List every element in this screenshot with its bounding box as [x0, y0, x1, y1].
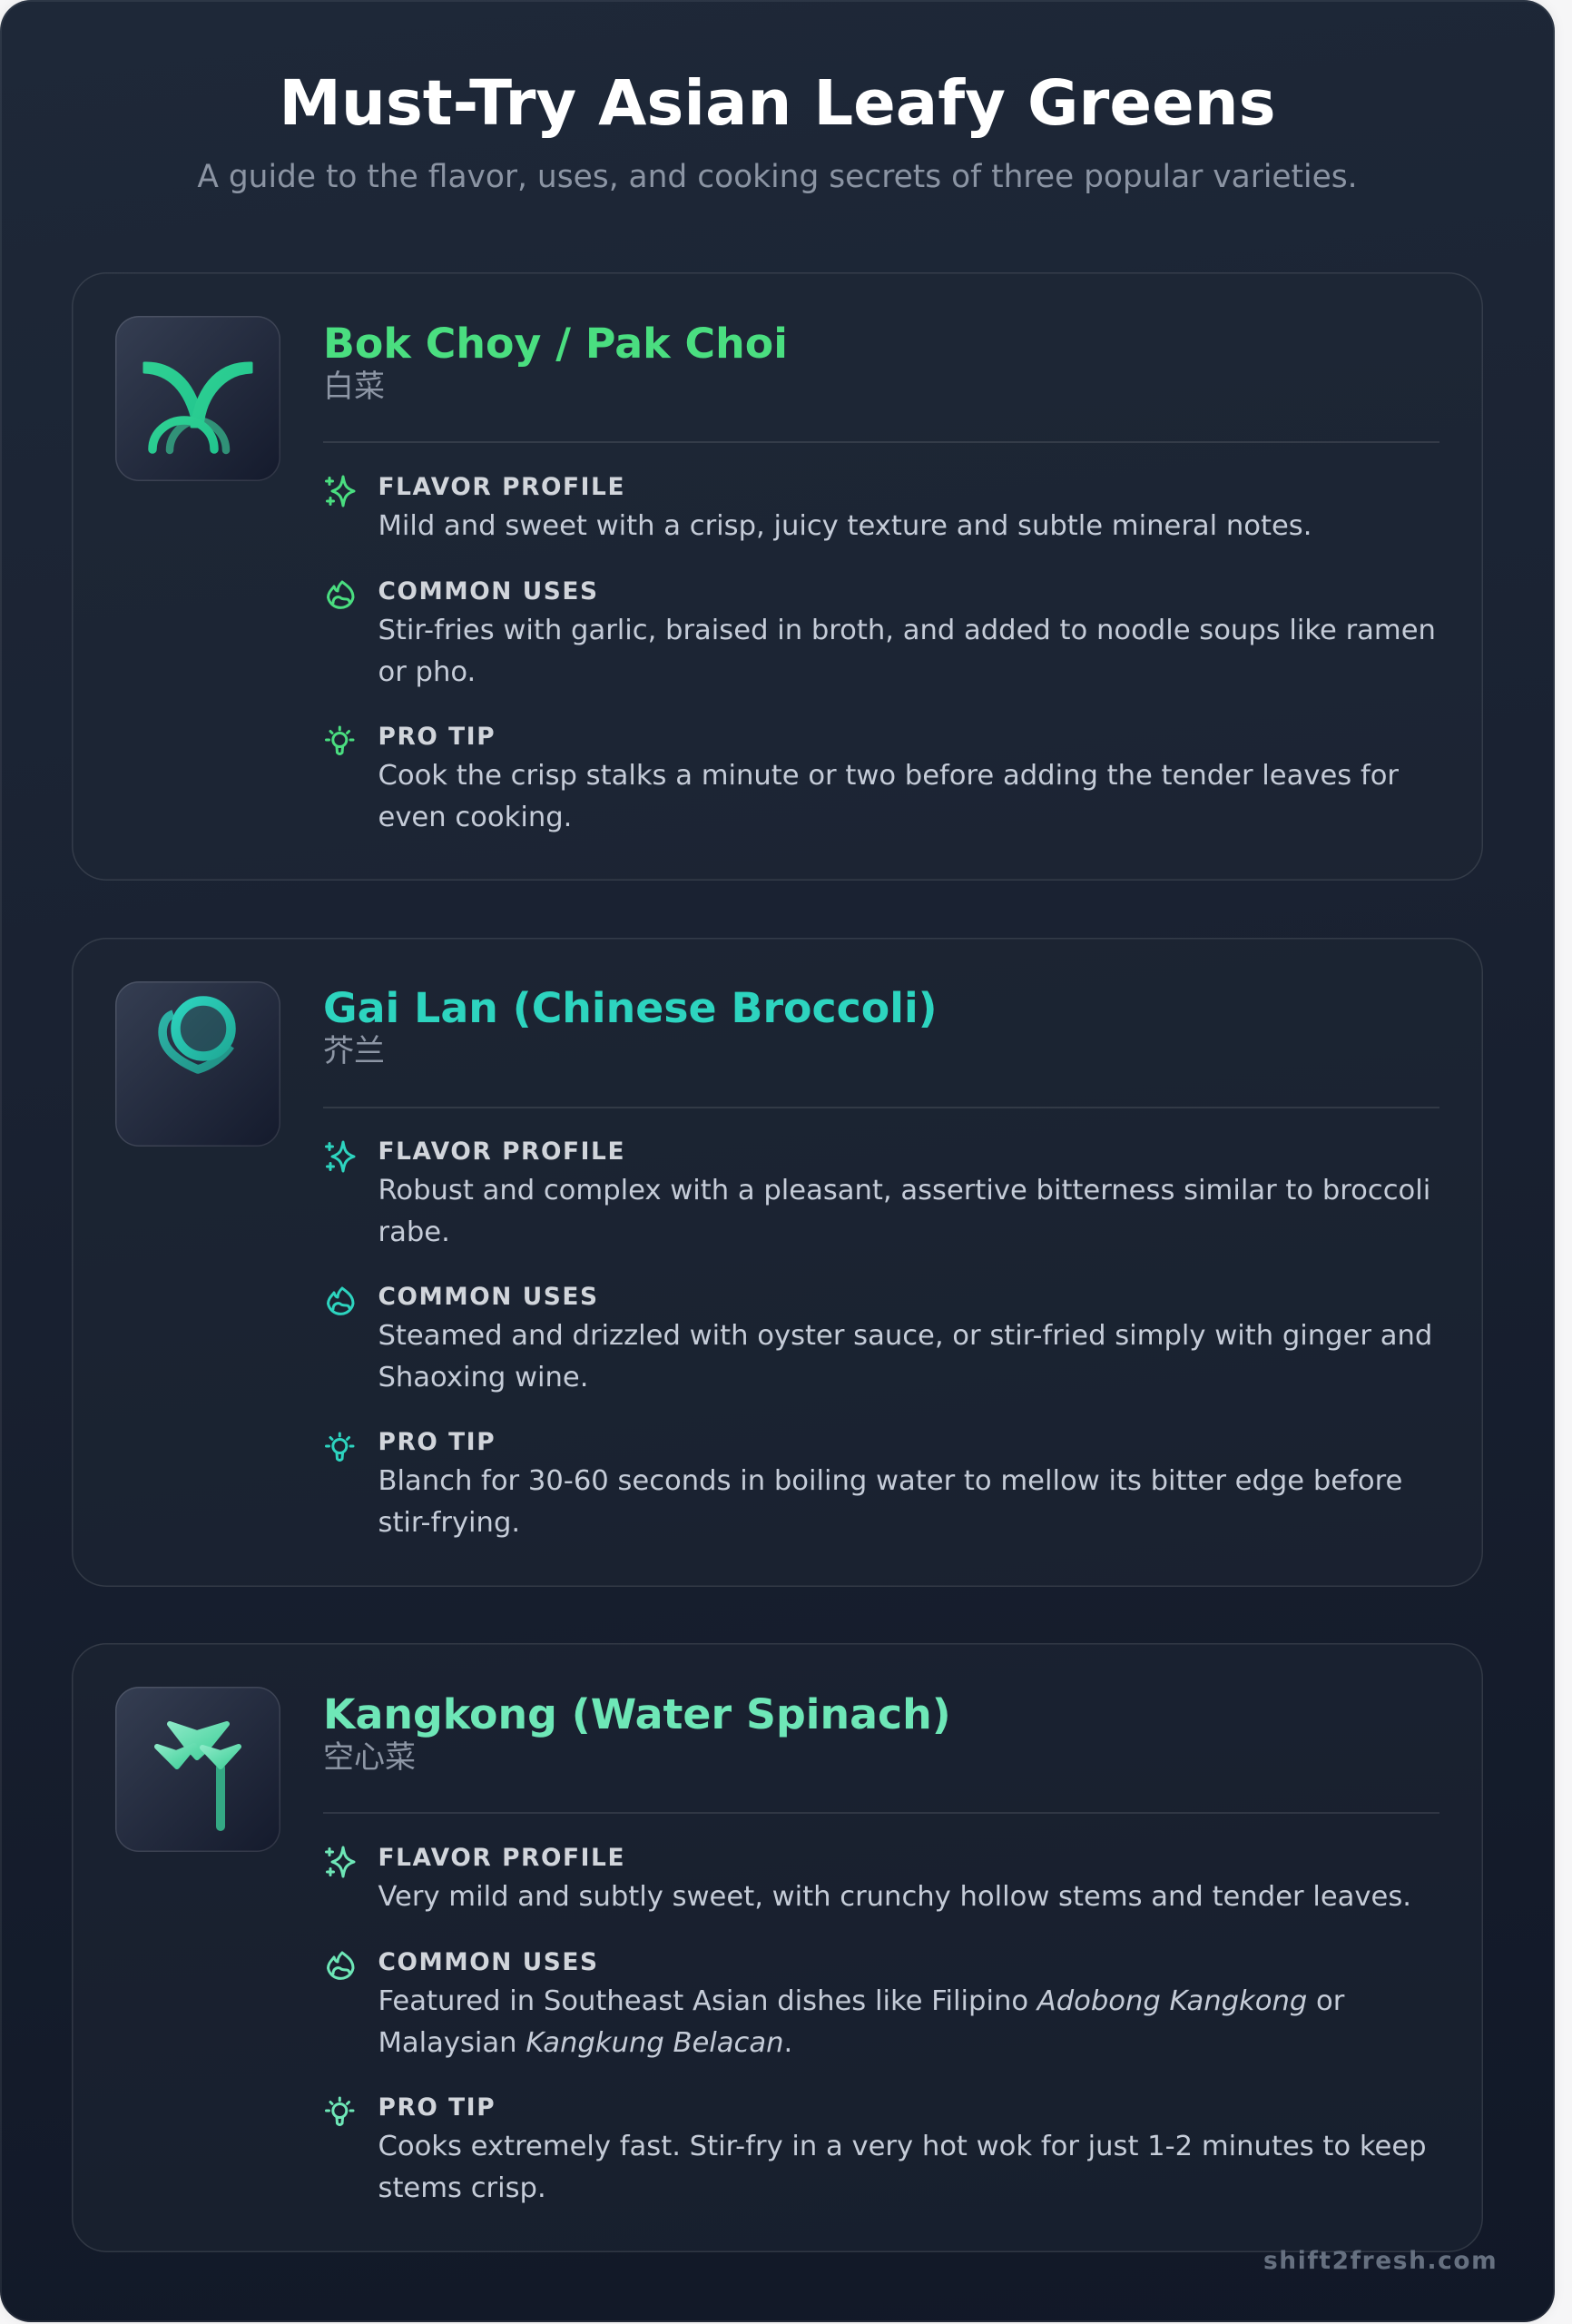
- label: common uses: COMMON USES: [378, 1283, 599, 1311]
- label: common uses: COMMON USES: [378, 577, 599, 606]
- text: common uses: Malaysian Kangkung Belacan.: [378, 2026, 792, 2059]
- icon: kangkong: [115, 1687, 280, 1852]
- icon: bulb: [325, 726, 354, 755]
- text: common uses: Featured in Southeast Asian dishes like Filipino Adobong Kangkong or: [378, 1984, 1344, 2017]
- text: flavor profile: Very mild and subtly sweet, with crunchy hollow stems and tender leaves.: [378, 1881, 1411, 1912]
- text: common uses: or pho.: [378, 655, 476, 688]
- heading: Gai Lan (Chinese Broccoli): [323, 983, 938, 1032]
- text: pro tip: stir-frying.: [378, 1507, 520, 1538]
- text: common uses: [378, 1320, 1432, 1393]
- text: flavor profile: Mild and sweet with a crisp, juicy texture and subtle mineral notes.: [378, 510, 1312, 541]
- subtitle: A guide to the flavor, uses, and cooking secrets of three popular varieties.: [197, 159, 1358, 195]
- text: common uses: Stir-fries with garlic, braised in broth, and added to noodle soups like ramen: [378, 614, 1436, 646]
- label: pro tip: PRO TIP: [378, 1428, 496, 1456]
- label: flavor profile: FLAVOR PROFILE: [378, 1137, 625, 1166]
- icon: bok choy: [115, 316, 280, 481]
- text: flavor profile: Robust and complex with a pleasant, assertive bitterness similar to broccoli: [378, 1175, 1430, 1206]
- heading: Kangkong (Water Spinach): [323, 1689, 951, 1738]
- icon: bulb: [325, 2097, 354, 2126]
- chinese name: 白菜: [323, 369, 385, 405]
- icon: gai lan: [115, 981, 280, 1147]
- icon: sparkle: [325, 1846, 356, 1877]
- title: Must-Try Asian Leafy Greens: [279, 67, 1276, 140]
- text: pro tip: stems crisp.: [378, 2171, 546, 2204]
- icon: sparkle: [325, 1140, 356, 1173]
- icon: flame: [327, 580, 354, 609]
- heading: Bok Choy / Pak Choi: [323, 319, 788, 368]
- text: common uses: [378, 614, 1436, 688]
- chinese name: 芥兰: [323, 1033, 385, 1069]
- text: pro tip: [378, 759, 1399, 833]
- panel: Kangkong: [72, 1643, 1483, 2252]
- icon: flame: [327, 1286, 354, 1315]
- text: common uses: Shaoxing wine.: [378, 1362, 588, 1393]
- icon: sparkle: [325, 476, 356, 507]
- label: flavor profile: FLAVOR PROFILE: [378, 473, 625, 501]
- text: pro tip: Blanch for 30-60 seconds in boiling water to mellow its bitter edge before: [378, 1465, 1402, 1496]
- text: common uses: Steamed and drizzled with oyster sauce, or stir-fried simply with ginger and: [378, 1320, 1432, 1351]
- label: flavor profile: FLAVOR PROFILE: [378, 1844, 625, 1872]
- text: pro tip: Cooks extremely fast. Stir-fry in a very hot wok for just 1-2 minutes to keep: [378, 2130, 1427, 2162]
- chinese name: 空心菜: [323, 1739, 416, 1776]
- label: common uses: COMMON USES: [378, 1948, 599, 1976]
- text: flavor profile: [378, 1175, 1430, 1247]
- text: pro tip: [378, 2130, 1427, 2204]
- text: common uses: [378, 1984, 1345, 2059]
- label: pro tip: PRO TIP: [378, 723, 496, 751]
- icon: bulb: [325, 1433, 354, 1462]
- label: pro tip: PRO TIP: [378, 2093, 496, 2122]
- watermark: shift2fresh.com: [1263, 2247, 1498, 2275]
- panel: Bok Choy: [72, 272, 1483, 881]
- text: pro tip: [378, 1465, 1402, 1538]
- panel: Gai Lan: [72, 938, 1483, 1587]
- text: flavor profile: rabe.: [378, 1216, 450, 1247]
- text: pro tip: even cooking.: [378, 801, 572, 833]
- icon: flame: [327, 1951, 354, 1980]
- text: pro tip: Cook the crisp stalks a minute or two before adding the tender leaves for: [378, 759, 1399, 792]
